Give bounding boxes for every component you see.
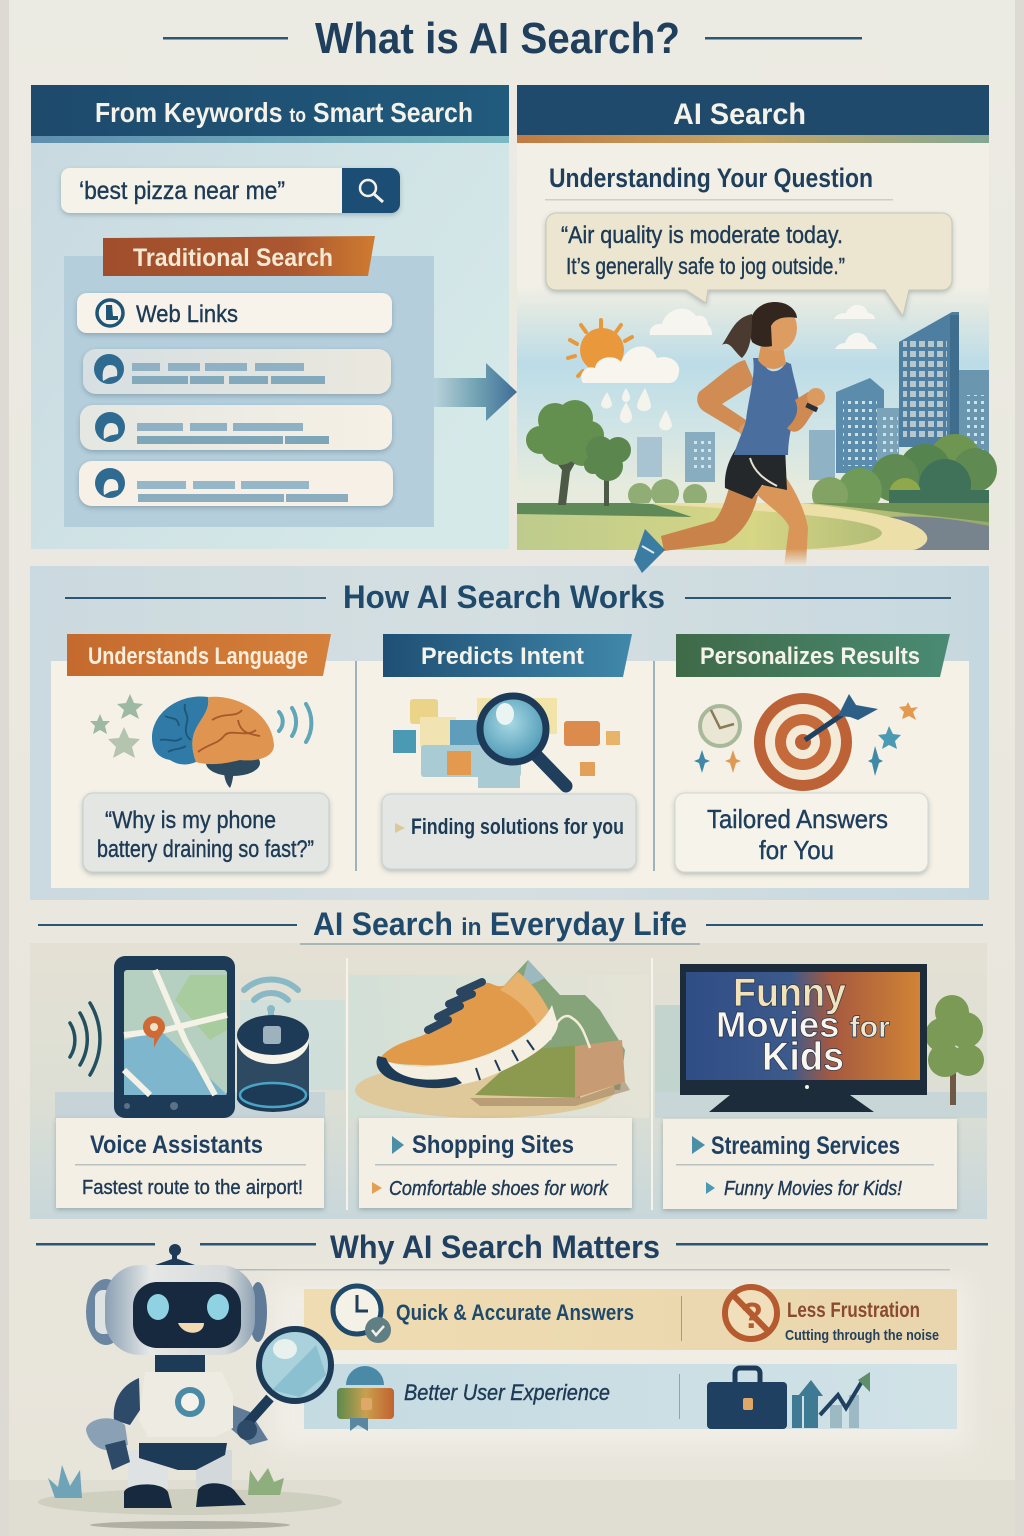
trees — [526, 400, 631, 506]
hair and ponytail — [749, 302, 797, 347]
card: streaming services — [663, 1119, 957, 1209]
quote box — [83, 793, 329, 872]
search bar: ‘best pizza near me” — [79, 177, 285, 205]
card: shopping sites — [359, 1118, 632, 1208]
icon: no question mark — [725, 1287, 777, 1339]
icon: no question mark: ? — [741, 1295, 763, 1336]
front leg — [753, 476, 808, 566]
left arm — [697, 360, 755, 436]
tab: understands language — [67, 634, 331, 676]
illustration: TV with movie title: Funny — [733, 971, 847, 1015]
heading: how AI search works: How AI Search Works — [343, 579, 665, 615]
heading: why AI search matters: Why AI Search Matters — [330, 1229, 660, 1265]
illustration: TV with movie title — [655, 964, 987, 1118]
illustration: TV with movie title: Kids — [762, 1035, 844, 1079]
icon: briefcase with growth chart — [707, 1368, 870, 1429]
tab: traditional search: Traditional Search — [133, 244, 333, 272]
illustration: jogger — [634, 302, 825, 573]
speech bubble: It’s generally safe to jog outside.” — [566, 253, 845, 279]
card: predicts intent — [382, 634, 636, 869]
panel: how AI search works — [30, 566, 989, 900]
result row 2 — [80, 405, 392, 450]
city buildings — [637, 312, 989, 482]
card: shopping sites: Shopping Sites — [412, 1131, 574, 1159]
icon: target with clock and stars — [694, 693, 918, 791]
rear leg and shoe — [634, 488, 758, 573]
shorts — [725, 447, 787, 499]
card: voice assistants: Voice Assistants — [90, 1131, 263, 1159]
card: voice assistants — [56, 1118, 324, 1208]
illustration: phone and smart speaker — [55, 956, 345, 1120]
tab: understands language: Understands Language — [88, 643, 308, 670]
smart speaker — [237, 980, 309, 1112]
robot legs and feet — [124, 1443, 246, 1508]
tab: personalizes results — [676, 634, 950, 677]
benefit bar: better user experience — [304, 1364, 957, 1431]
benefit bar: quick answers and less frustration: Cutting through the noise — [785, 1327, 939, 1344]
tab: predicts intent — [383, 634, 632, 677]
section: why AI search matters — [36, 1229, 988, 1529]
result row 1 — [83, 349, 391, 394]
panel: AI search — [517, 85, 997, 550]
heading: everyday life: AI Search in Everyday Life — [313, 906, 687, 942]
icon: magnifier with data blocks — [393, 696, 620, 788]
robot magnifier — [237, 1329, 331, 1440]
quote box: “Why is my phone — [105, 807, 276, 834]
neck and head — [758, 340, 786, 369]
tab: traditional search — [103, 236, 375, 276]
card: streaming services: Streaming Services — [711, 1132, 900, 1160]
illustration: shoe and shoebox — [349, 960, 649, 1118]
heading: understanding your question: Understanding Your Question — [549, 163, 873, 193]
answer box — [675, 793, 928, 872]
card: personalizes results — [675, 634, 950, 872]
card: streaming services: Funny Movies for Kids! — [724, 1178, 902, 1200]
speech bubble: “Air quality is moderate today. — [561, 222, 843, 249]
benefit bar: quick answers and less frustration — [304, 1286, 957, 1350]
panel header: keywords — [31, 85, 509, 143]
benefit bar: quick answers and less frustration: Quick & Accurate Answers — [396, 1300, 634, 1325]
icon: clock with check — [333, 1286, 391, 1343]
benefit bar: quick answers and less frustration: Less Frustration — [787, 1299, 920, 1322]
result row: web links — [77, 293, 392, 333]
panel: AI search in everyday life — [30, 906, 987, 1219]
robot arms — [86, 1378, 268, 1470]
panel: from keywords to smart search — [31, 85, 509, 549]
scene: park with city — [517, 285, 997, 550]
answer box: Finding solutions for you — [411, 814, 624, 839]
answer box — [382, 794, 636, 869]
tab: personalizes results: Personalizes Results — [700, 643, 920, 670]
title: What is AI Search? — [315, 14, 680, 63]
bushes — [628, 434, 997, 513]
icon: brain with stars and sound waves — [90, 694, 311, 788]
tab: predicts intent: Predicts Intent — [421, 643, 584, 670]
panel header: keywords: From Keywords to Smart Search — [95, 97, 473, 128]
weather icon: sun, cloud and rain — [568, 320, 679, 430]
answer box: for You — [759, 835, 834, 865]
panel header: AI search: AI Search — [673, 98, 806, 131]
right arm — [787, 392, 820, 432]
card: shopping sites: Comfortable shoes for work — [389, 1178, 609, 1200]
traditional search results box — [64, 236, 434, 527]
speech bubble — [546, 213, 952, 316]
illustration: TV with movie title: Movies for — [716, 1004, 890, 1045]
tank top — [734, 358, 799, 455]
search bar — [61, 168, 400, 213]
icon: badge — [337, 1366, 394, 1431]
panel header: AI search — [517, 85, 989, 143]
card: understands language — [67, 634, 331, 872]
illustration: robot with magnifier — [38, 1244, 342, 1529]
ground with path — [517, 503, 989, 550]
card: voice assistants: Fastest route to the airport! — [82, 1177, 303, 1199]
robot head — [86, 1244, 267, 1355]
quote box: battery draining so fast?” — [97, 836, 314, 863]
result row: web links: Web Links — [136, 301, 238, 328]
robot torso — [139, 1352, 233, 1437]
arrow: keywords to AI search — [434, 363, 517, 421]
benefit bar: better user experience: Better User Experience — [404, 1380, 610, 1405]
answer box: Tailored Answers — [707, 804, 888, 834]
result row 3 — [79, 461, 393, 506]
clouds — [650, 305, 877, 349]
